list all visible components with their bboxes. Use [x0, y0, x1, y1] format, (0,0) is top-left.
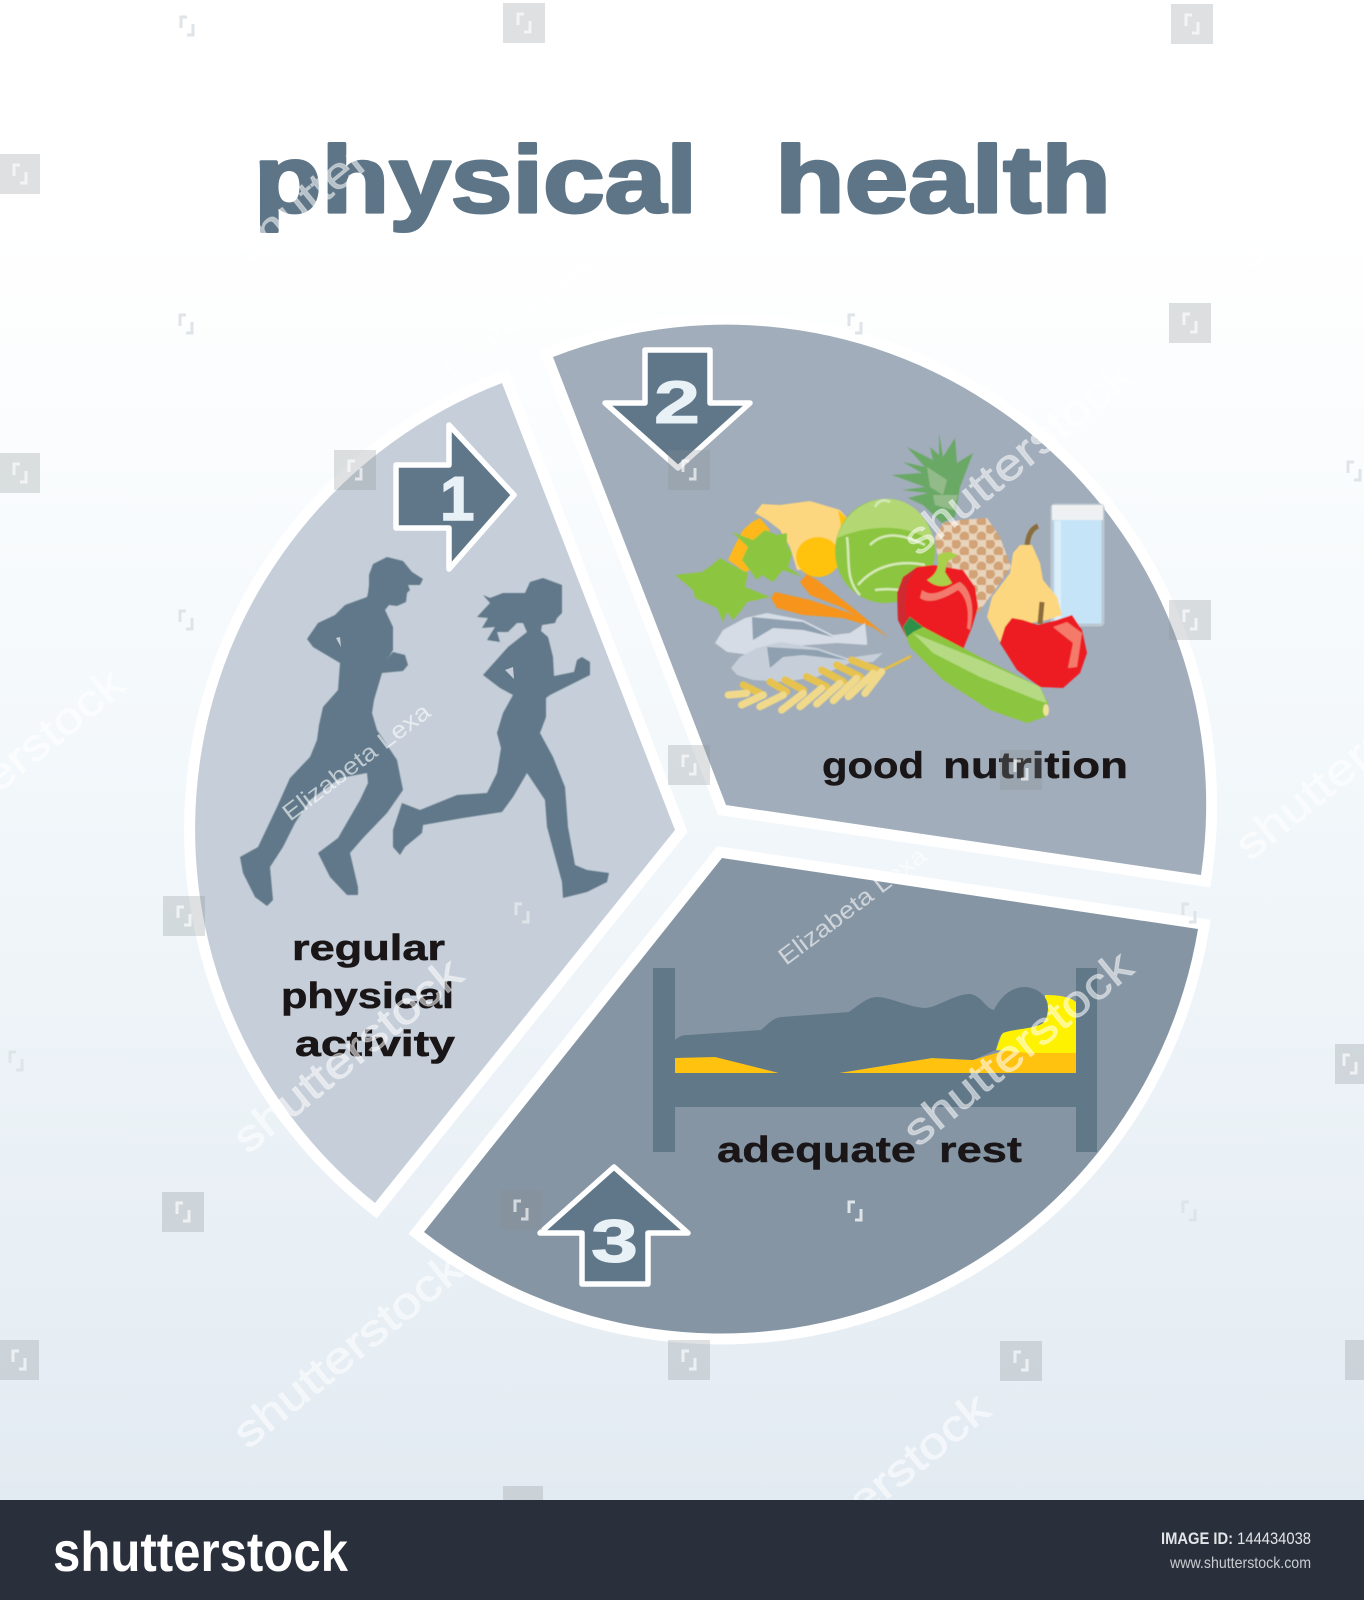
label: good nutrition [822, 745, 1128, 786]
image id: IMAGE ID: 144434038 [1161, 1529, 1311, 1548]
watermarks: shutterstock [893, 941, 1143, 1156]
label: good nutrition: good [822, 745, 924, 786]
arrow 3 [540, 1167, 688, 1284]
label: adequate rest: rest [939, 1129, 1022, 1170]
title [254, 127, 1111, 233]
pillow [996, 995, 1076, 1053]
watermarks: Elizabeta Lexa [439, 254, 598, 383]
icon: cabbage [835, 499, 935, 603]
watermarks: Elizabeta Lexa [277, 698, 436, 827]
label: good nutrition: nutrition [943, 745, 1128, 786]
icon: fish [715, 613, 883, 682]
mattress [675, 1040, 1076, 1073]
female runner arm gap [505, 667, 514, 679]
icon: glass of water [1052, 505, 1103, 625]
arrow 2: 2 [654, 369, 700, 436]
icon: bed with sleeper [653, 968, 1097, 1152]
watermarks: shutterstock [223, 948, 473, 1163]
website: www.shutterstock.com [1169, 1555, 1311, 1572]
icon: food group [675, 433, 1103, 723]
icon: carrots [771, 574, 888, 637]
label: regular physical activity: physical [281, 975, 454, 1016]
footer bar [0, 1500, 1364, 1600]
panel: good nutrition [553, 325, 1206, 875]
icon: wheat [728, 657, 910, 710]
label: regular physical activity: regular [292, 927, 445, 968]
label: regular physical activity: activity [295, 1023, 455, 1064]
panel: regular physical activity [195, 383, 675, 1203]
label: adequate rest [717, 1129, 1022, 1170]
bed frame [653, 968, 1097, 1152]
icon: pear [987, 526, 1062, 642]
watermarks: shutterstock [223, 1243, 473, 1458]
title: health [775, 127, 1111, 233]
icon: zucchini [903, 617, 1049, 723]
arrow 1: 1 [440, 465, 474, 534]
icon: lemon [728, 501, 849, 577]
pie slice 1 [195, 383, 675, 1203]
icon: female runner [393, 578, 609, 898]
icon: pineapple [892, 433, 1011, 613]
label: regular physical activity [281, 927, 455, 1064]
icon: carrot tops [675, 530, 802, 622]
label: adequate rest: adequate [717, 1129, 916, 1170]
watermarks: shutterstock [750, 1383, 1000, 1598]
icon: bell pepper [897, 552, 978, 652]
pie slice 2 [553, 325, 1206, 875]
sleeper [675, 987, 1048, 1073]
arrow 2 [605, 350, 750, 468]
watermarks: shutterstock [223, 58, 473, 273]
watermarks: Elizabeta Lexa [773, 842, 932, 971]
arrow 1 [396, 425, 514, 569]
icon: apple [1000, 602, 1087, 688]
arrow 3: 3 [591, 1208, 638, 1275]
male runner arm gap [336, 637, 341, 647]
panel: adequate rest [424, 858, 1198, 1334]
watermarks: shutterstock [893, 350, 1143, 565]
footer logo: shutterstock [53, 1520, 349, 1583]
title: physical [254, 127, 697, 233]
pie slice 3 [424, 858, 1198, 1334]
icon: male runner [240, 557, 423, 906]
